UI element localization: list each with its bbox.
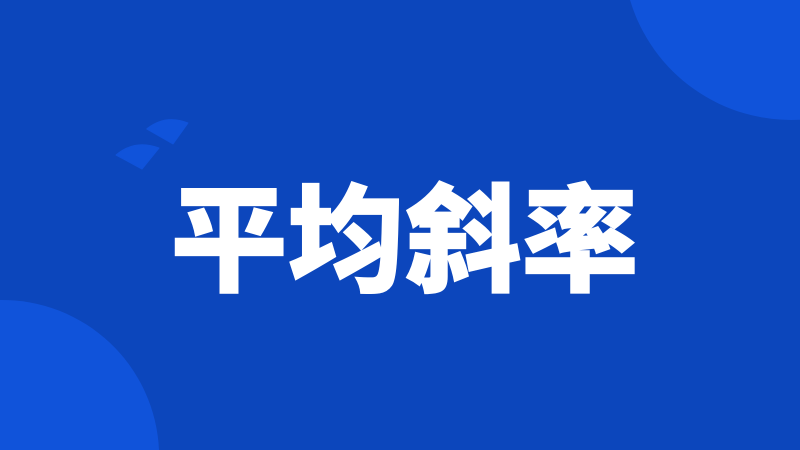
title: 平均斜率 <box>170 176 638 307</box>
